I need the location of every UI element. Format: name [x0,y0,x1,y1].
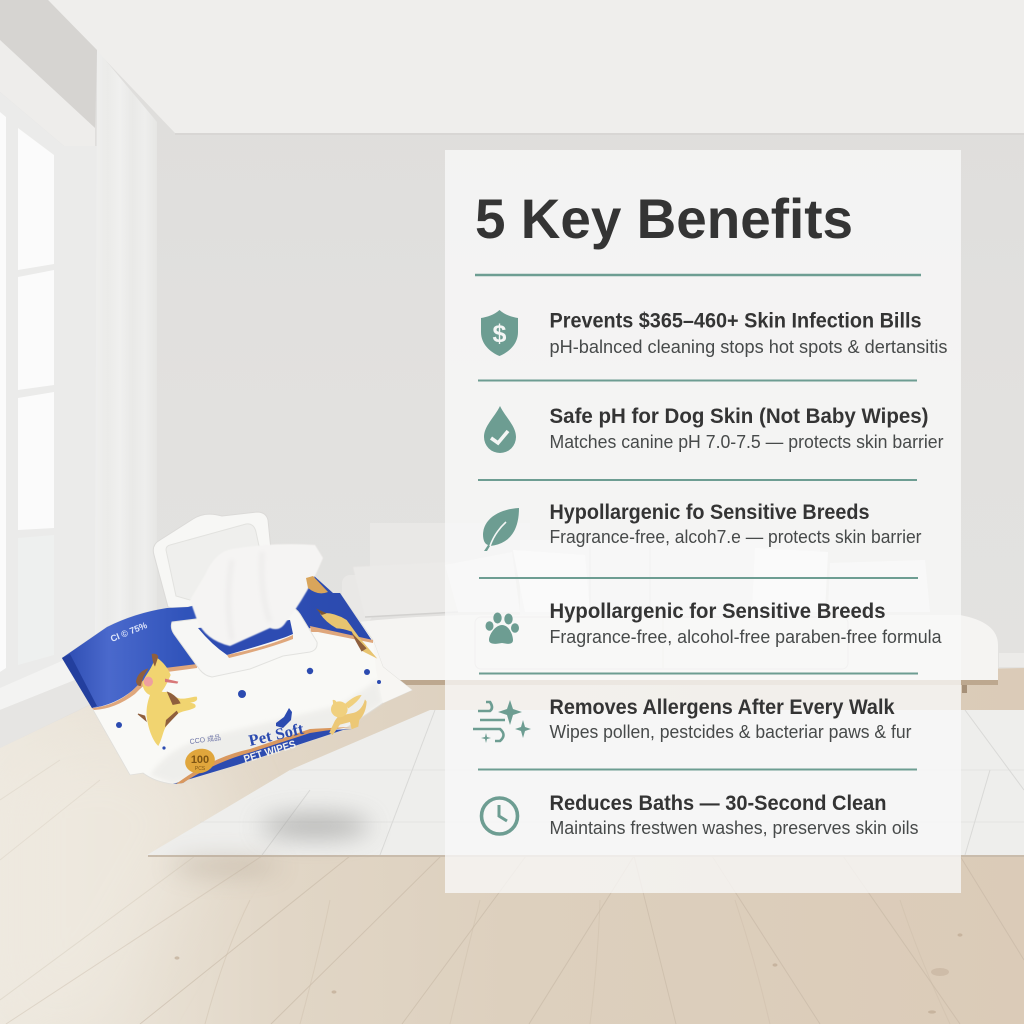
description: Fragrance-free, alcoh7.e — protects skin barrier [550,526,922,547]
heading: Reduces Baths — 30-Second Clean [550,792,886,815]
package lid [153,512,272,612]
sofa cushions [353,562,458,617]
icon: shield with dollar [481,310,518,356]
benefit 3 [483,501,922,551]
product name: PET WIPES [242,739,298,766]
package body [62,575,412,784]
icon: paw [486,612,519,644]
panel: benefits [445,150,961,893]
rug [147,710,1024,875]
description: pH-balnced cleaning stops hot spots & dertansitis [550,336,948,357]
description: Matches canine pH 7.0-7.5 — protects skin barrier [550,431,944,452]
benefit 2 [484,405,944,453]
wipe sheet [190,544,323,646]
wipes package [62,512,412,784]
benefit 4 [486,600,942,647]
icon: clock [482,798,518,834]
blue opening [198,620,293,655]
package small print: CI © 75% [109,620,149,644]
floor grain [205,900,950,1024]
sofa seat [358,615,998,680]
window panes [0,112,54,672]
blue top band [62,575,373,708]
baseboard [999,653,1024,667]
count badge: PCS [195,766,206,772]
heading: Hypollargenic for Sensitive Breeds [550,600,886,623]
paw dots [116,668,381,750]
heading: Hypollargenic fo Sensitive Breeds [550,501,870,524]
icon: shield with dollar: $ [493,320,507,348]
package fold shade [150,680,383,784]
left wall and window [0,0,157,748]
brand emblem [276,708,292,728]
lower wall beside curtain [95,630,157,702]
dog illustration top right [316,608,377,659]
floor knots [174,933,962,1014]
dog illustration right [329,695,367,735]
opening frame [171,607,317,677]
benefit 1 [481,310,948,357]
white flap right [373,640,412,703]
benefit 5 [473,696,912,743]
dog illustration left [136,654,197,746]
window sill [0,655,95,710]
package shadow [260,814,370,838]
heading: Prevents $365–460+ Skin Infection Bills [550,310,922,332]
floor sun patch [0,730,230,1024]
badge on flap [306,576,328,593]
count badge [182,746,218,776]
description: Wipes pollen, pestcides & bacteriar paws & fur [550,721,912,742]
description: Fragrance-free, alcohol-free paraben-free formula [550,626,942,647]
brand name: Pet Soft [247,721,306,750]
count badge: 100 [191,754,209,766]
curtain [95,50,157,642]
icon: leaf [483,508,519,551]
icon: water drop with check [484,406,516,453]
description: Maintains frestwen washes, preserves skin oils [550,817,918,838]
ceiling [48,0,1024,133]
floor [0,668,1024,1024]
sofa [342,523,1024,693]
heading: Safe pH for Dog Skin (Not Baby Wipes) [550,405,928,428]
benefit 6 [482,792,918,838]
floor planks [0,760,1024,1024]
title: 5 Key Benefits [475,187,853,250]
bottom blue band [173,729,352,784]
wipes package: CCO 成品 [189,733,221,746]
icon: wind and sparkles [473,700,531,743]
heading: Removes Allergens After Every Walk [550,696,895,719]
